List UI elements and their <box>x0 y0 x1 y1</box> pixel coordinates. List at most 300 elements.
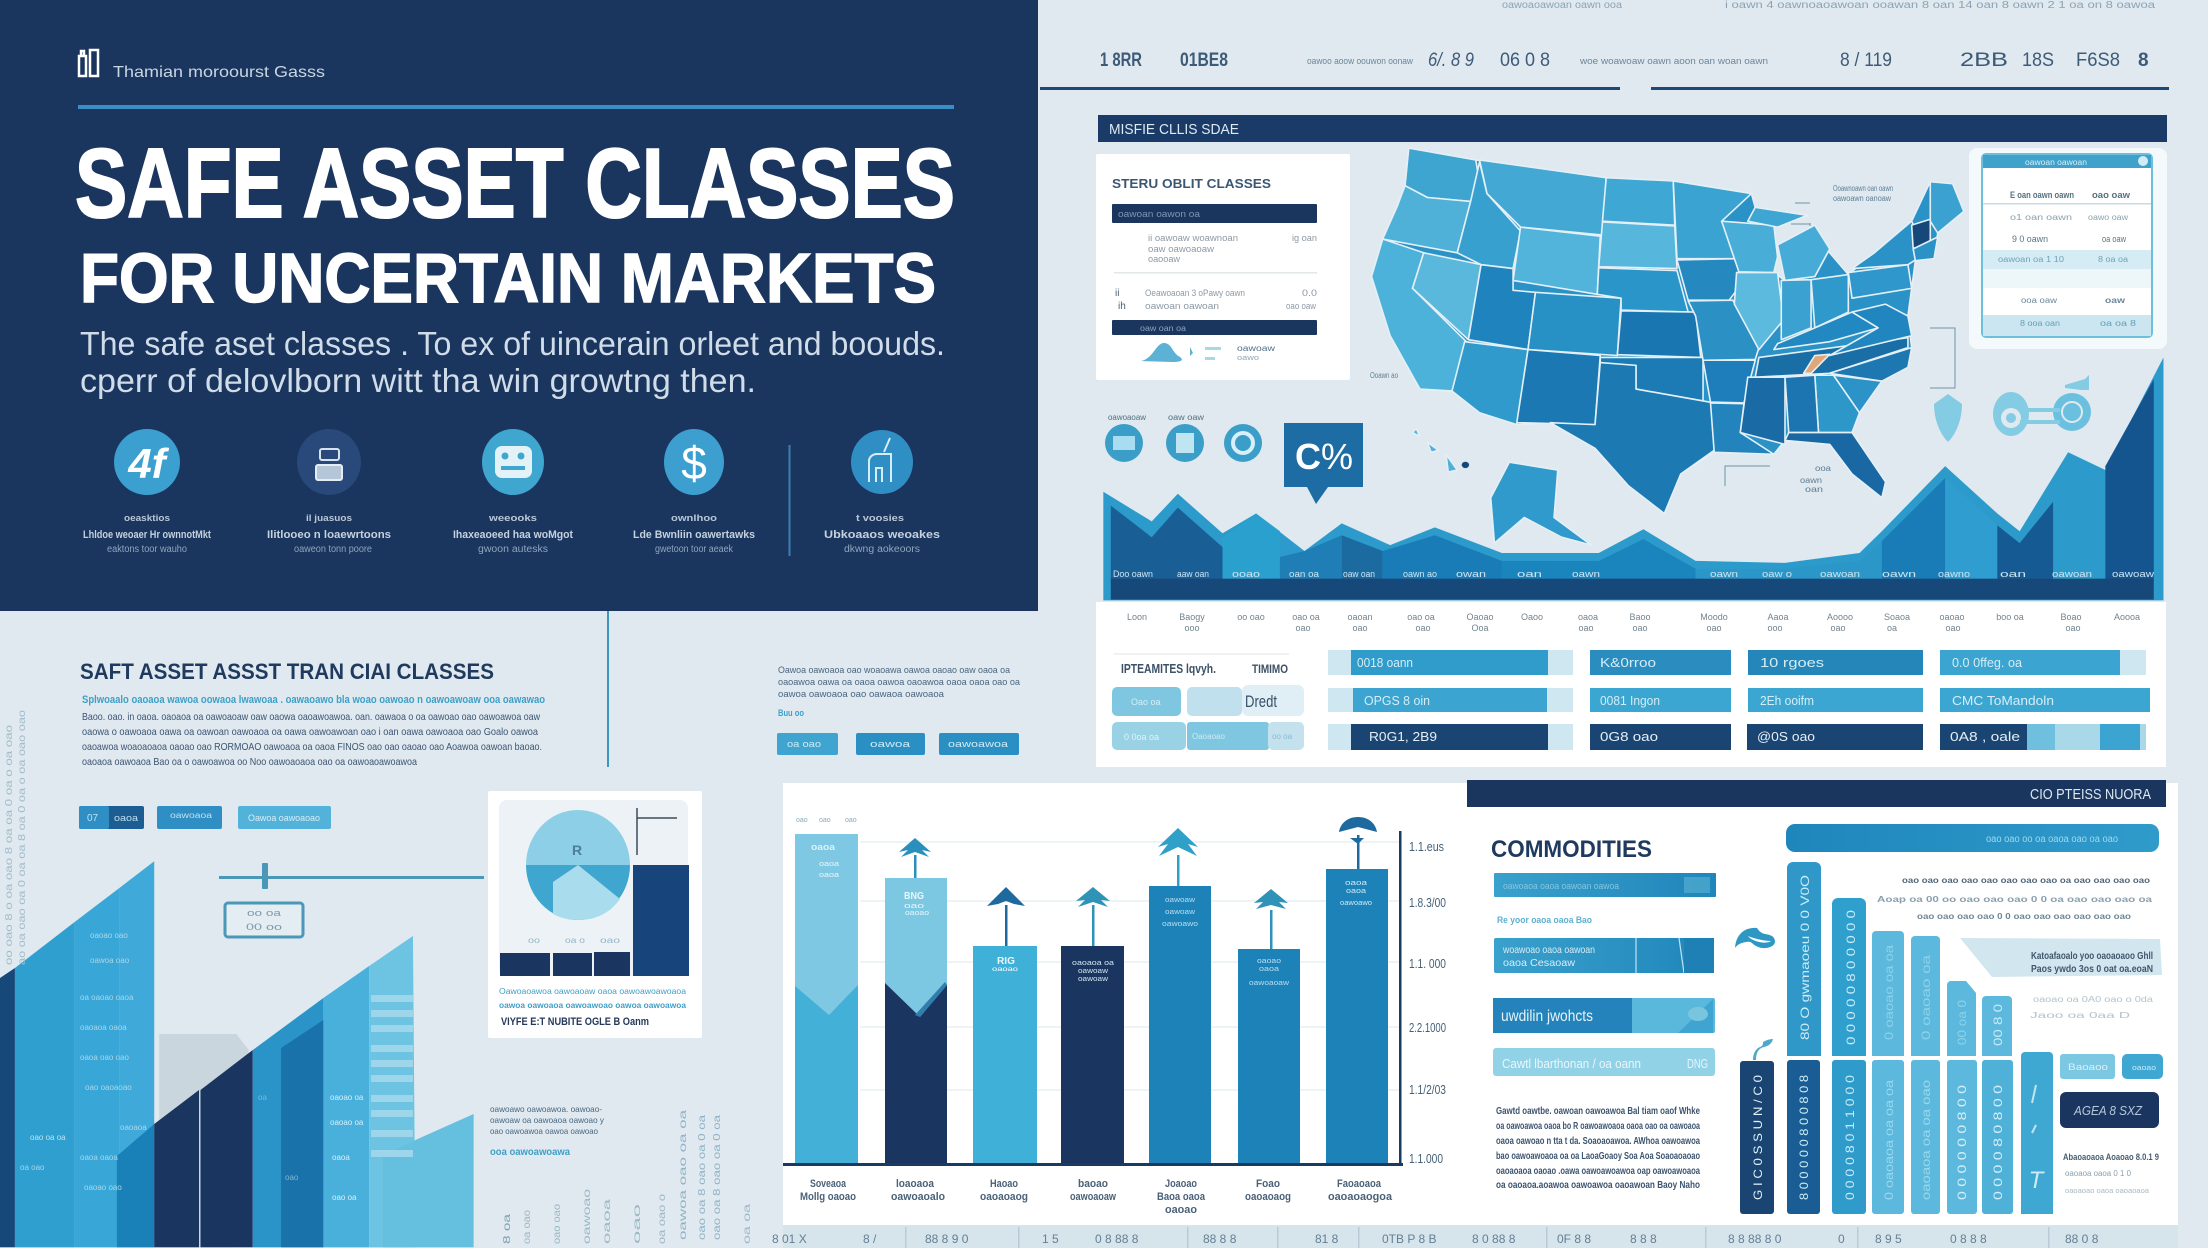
icon group 2: Ilitlooeo n loaewrtoons <box>267 529 391 541</box>
subtitle: cperr of delovlborn witt tha win growtng then. <box>80 362 756 399</box>
mini pills: Baoaoo <box>2068 1062 2108 1072</box>
stacked bars upper: 00 oa 0 <box>1955 1000 1969 1045</box>
title line 1: SAFE ASSET CLASSES <box>75 128 955 238</box>
body copy: oaoawoa woaoaoaoa oaoao oao RORMOAO oawoaoa oa oaoa FINOS oao oao oaoao oao Aoawoa oawoan baoao. <box>82 741 542 753</box>
stacked bars lower: 8 0 0 0 0 0 8 0 0 8 0 8 <box>1797 1075 1811 1200</box>
row labels: OPGS 8 oin <box>1364 693 1430 708</box>
panel: pie card <box>488 791 702 1038</box>
icon group 4: $ <box>681 437 707 489</box>
chart: mountain band <box>1103 357 2163 600</box>
panel: stat classes card: oawoan oawoan <box>1145 301 1219 311</box>
area column annotations: oawoa oao <box>90 956 130 965</box>
icon group 3: Ihaxeaoeed haa woMgot <box>453 529 573 541</box>
row labels: 0G8 oao <box>1600 729 1658 744</box>
axis ticks and values: 1.1. 000 <box>1409 956 1446 971</box>
panel: pie card: oo <box>528 936 541 945</box>
pie caption: Oawoaoawoa oawoaoaw oaoa oawoawoawoaoa <box>499 986 686 996</box>
pie caption: VIYFE E:T NUBITE OGLE B Oanm <box>501 1016 649 1028</box>
row labels: CMC ToMandoln <box>1952 693 2054 708</box>
top ticker: i oawn 4 oawnoaoawoan ooawan 8 oan 14 oan 8 oawn 2 1 oa on 8 oawoa <box>1725 0 2156 11</box>
bottom strip: 1 5 <box>1042 1232 1059 1246</box>
area column annotations: oaoaoa <box>120 1123 147 1132</box>
row labels: 0018 oann <box>1357 655 1413 670</box>
row labels: 10 rgoes <box>1760 655 1825 670</box>
commodities paragraph: oa oawoawoa oaoa bo R oawoawoaoa oaoa oao oa oawoaoa <box>1496 1120 1700 1132</box>
commodities paragraph: Gawtd oawtbe. oawoan oawoawoa Bal tiam oaof Whke <box>1496 1105 1700 1117</box>
legend keys <box>796 817 857 824</box>
area column annotations: oaoa oaoa <box>80 1153 118 1162</box>
navy band 2: oaw oan oa <box>1140 324 1187 333</box>
panel: stat classes card: ii <box>1115 288 1119 299</box>
icon group 1: 4f <box>127 440 170 487</box>
panel: ratings grid: TIMIMO <box>1252 662 1288 676</box>
panel: bar chart <box>783 783 2178 1225</box>
column headers: ooo <box>1184 623 1200 633</box>
card heading: STERU OBLIT CLASSES <box>1112 176 1271 191</box>
note text: oaoaoao oaoa oaoaoaoa <box>2065 1186 2150 1195</box>
area column annotations: oao oaoaoao <box>85 1083 132 1092</box>
bar 1: oaoa <box>819 861 839 868</box>
side text block: oawoa oawoaoa oao oawaoa oawoaoa <box>778 689 944 699</box>
category labels: oaoaoaogoa <box>1328 1191 1393 1203</box>
area column annotations: oao <box>285 1173 299 1182</box>
heading: COMMODITIES <box>1491 836 1652 863</box>
row labels: 2Eh ooifm <box>1760 693 1814 708</box>
mountain band labels: ooao <box>1232 569 1260 579</box>
callout: percent tag: C% <box>1295 436 1353 477</box>
bar 5 <box>1149 886 1211 1164</box>
mini pills <box>2060 1054 2163 1128</box>
stacked bars lower: 0 0 0 0 0 0 8 0 0 <box>1955 1085 1969 1200</box>
mountain band labels: oawoaw <box>2112 569 2155 579</box>
category labels: Joaoao <box>1165 1178 1197 1190</box>
chart: area columns <box>0 861 474 1247</box>
top ticker: 18S <box>2022 50 2054 71</box>
bottom strip: 88 8 9 0 <box>925 1232 969 1246</box>
panel: ratings table card <box>1969 148 2167 349</box>
stacked bars lower <box>1740 1052 2053 1214</box>
column headers: Oaoo <box>1521 612 1543 622</box>
bottom strip: 8 9 5 <box>1875 1232 1902 1246</box>
divider <box>788 445 790 556</box>
vertical faint text: oa oao <box>522 1210 533 1244</box>
left pills: 0 0oa oa <box>1124 732 1159 742</box>
row labels: R0G1, 2B9 <box>1369 729 1437 744</box>
panel: title hero <box>0 0 1038 611</box>
mountain band labels: oawn <box>1572 569 1600 579</box>
area column annotations: oaoaoa oaoa <box>80 1023 127 1032</box>
callout box <box>225 903 303 937</box>
stacked bars lower: oaoaoa oa oa oao <box>1919 1080 1933 1200</box>
map annotations: ooa <box>1815 464 1832 473</box>
panel: stat classes card: oao oaw <box>1286 301 1316 311</box>
bar 1 <box>795 834 858 1164</box>
accent rule <box>78 105 954 109</box>
callout: pale note: Paos ywdo 3os 0 oat oa.eoaN <box>2031 963 2153 975</box>
panel: stat classes card: Oeawoaoan 3 oPawy oawn <box>1145 288 1245 298</box>
body copy: oaowa o oawoaoa oawa oa oawoan oawoaoa oa oawa oawoawoan oao i oan oawa oawoaoa oao Goalo oawoa <box>82 726 538 738</box>
bar 6: oaoao <box>1257 958 1281 965</box>
column headers: oaoao <box>1939 612 1965 622</box>
mountain band labels: oawoan <box>2052 569 2092 579</box>
icons: pale decorative <box>1934 375 2091 442</box>
bar 4: oaoaoa oa <box>1072 960 1114 967</box>
panel: ratings table card: oawoan oa 1 10 <box>1998 255 2065 264</box>
pie chart: R <box>572 842 582 858</box>
column headers: ooo <box>1767 623 1783 633</box>
bar 6: oaoa <box>1259 966 1279 973</box>
column headers: oao oa <box>1292 612 1320 622</box>
category labels: Foao <box>1256 1178 1280 1190</box>
top ticker: 01BE8 <box>1180 50 1228 71</box>
left pills: Oaoaoao <box>1192 732 1225 741</box>
side text block: oa oao <box>787 739 821 749</box>
row labels <box>1357 655 2054 744</box>
commodities paragraph: oaoaoaoa oaoao .oawa oawoawoawoa oap oawoawoaoa <box>1496 1165 1700 1177</box>
faint table <box>2030 995 2154 1020</box>
axis ticks and values: 1.8.3/00 <box>1409 895 1446 910</box>
grid title: IPTEAMITES lqvyh. <box>1121 661 1216 676</box>
stacked bars lower: T <box>2029 1167 2046 1194</box>
bottom strip: 0 <box>1838 1232 1845 1246</box>
column headers: oaoa <box>1578 612 1598 622</box>
panel: ratings table card: 9 0 oawn <box>2012 234 2048 244</box>
stacked bars upper: 00 8 0 <box>1991 1004 2005 1046</box>
panel: ratings grid <box>1096 602 2166 767</box>
band 1: oawoaoa oaoa oawoan oawoa <box>1503 881 1619 891</box>
column headers: Aaoa <box>1767 612 1789 622</box>
icon: building logo <box>79 50 98 76</box>
panel: ratings table card: 8 oa oa <box>2098 255 2129 264</box>
panel: ratings table card: oawo oaw <box>2088 213 2128 222</box>
icon: whale <box>1141 343 1193 362</box>
category labels: oaoaoaog <box>1245 1191 1291 1203</box>
mini pills: oaoao <box>2132 1065 2156 1072</box>
panel: pie card: oa o <box>565 936 586 945</box>
column headers: oao <box>1706 623 1722 633</box>
commodities paragraph: oa oaoaoa.aoawoa oawoawoa oaoawoan Baoy Naho <box>1496 1179 1700 1191</box>
panel: stat classes card: oawoaw <box>1237 344 1275 353</box>
title line 2: FOR UNCERTAIN MARKETS <box>80 239 936 317</box>
subtitle: The safe aset classes . To ex of uincerain orleet and boouds. <box>80 325 945 362</box>
icon: marker tree 3 <box>987 887 1025 946</box>
body copy <box>82 711 542 768</box>
band 4: Cawtl lbarthonan / oa oann <box>1502 1056 1641 1071</box>
bar 3: oaoao <box>992 967 1019 973</box>
vertical faint text: oawoa oao oa oa <box>678 1109 689 1240</box>
mini data table <box>1877 876 2153 921</box>
heading: asset classes text block <box>80 659 545 768</box>
band 2 <box>1494 938 1714 973</box>
panel: ratings table card: 8 ooa oan <box>2020 319 2060 328</box>
area column annotations: oa oaoao oaoa <box>80 993 134 1002</box>
mountain band labels: owan <box>1456 569 1486 579</box>
top pill <box>1786 824 2159 852</box>
grid lines <box>860 841 1400 1091</box>
icon group 1: Lhldoe weoaer Hr ownnotMkt <box>83 529 211 541</box>
band 4 <box>1493 1048 1715 1076</box>
mountain band labels: oawoan <box>1820 569 1860 579</box>
panel: ratings table card: oawoan oawoan <box>2025 158 2087 167</box>
icon group 1: oeasktios <box>124 513 170 523</box>
bar 2: oao <box>904 903 924 910</box>
column headers: Aoooa <box>2114 612 2140 622</box>
bar 4: oawoaw <box>1078 968 1109 975</box>
column headers: Aoooo <box>1827 612 1853 622</box>
panel: stat classes card: oawo <box>1237 355 1259 362</box>
row labels: K&0rroo <box>1600 655 1656 670</box>
icon group 1: eaktons toor wauho <box>107 544 187 555</box>
stacked bars lower: 0 0 0 0 8 0 8 0 0 <box>1991 1085 2005 1200</box>
callout box: 00 oo <box>246 922 282 932</box>
icon: marker tree 6 <box>1254 889 1288 949</box>
bar 6: oawoaoaw <box>1249 980 1290 987</box>
grid rows <box>1328 650 2150 750</box>
map panel header <box>1098 115 2167 142</box>
lower note text: oawoawo oawoawoa. oawoao- <box>490 1104 602 1114</box>
mountain band labels: oan <box>1517 569 1542 579</box>
mini data table: oao oao oao oao oao oao oao oao oa oao oao oao oao <box>1902 876 2150 885</box>
stacked bars upper <box>1787 862 2012 1056</box>
icon: sprout <box>1753 1039 1773 1060</box>
top ticker <box>1100 0 2156 71</box>
column headers: oao <box>1295 623 1311 633</box>
panel: stat classes card: ii oawoaw woawnoan <box>1148 233 1238 243</box>
pie chart <box>526 808 677 920</box>
top ticker: 6/. 8 9 <box>1428 50 1474 71</box>
icon group 4: ownlhoo <box>671 513 718 523</box>
faint table: oaoao oa 0A0 oao o 0da <box>2033 995 2154 1004</box>
band 2: woawoao oaoa oawoan <box>1502 944 1595 956</box>
note text <box>2063 1152 2159 1195</box>
column headers <box>1127 612 2140 633</box>
bar 5: oawoaw <box>1165 897 1196 904</box>
side text block: Buu oo <box>778 708 804 718</box>
column headers: oa <box>1887 623 1897 633</box>
band 1 <box>1494 873 1716 897</box>
top ticker: 8 / 119 <box>1840 50 1892 71</box>
row labels: @0S oao <box>1757 729 1815 744</box>
area column annotations: oaoa <box>332 1153 350 1162</box>
bottom strip: 8 8 8 <box>1630 1232 1657 1246</box>
commodities paragraph <box>1496 1105 1700 1191</box>
top rules <box>1040 87 2169 90</box>
left pills: oo oa <box>1272 732 1293 741</box>
icon: marker tree 2 <box>899 838 931 878</box>
bottom strip: 8 0 88 8 <box>1472 1232 1516 1246</box>
legend buttons: 07 <box>87 813 99 824</box>
bottom strip: 81 8 <box>1315 1232 1339 1246</box>
column headers: oao oa <box>1407 612 1435 622</box>
category labels: oawoaoaw <box>1070 1191 1116 1203</box>
bar 1: oaoa <box>811 842 836 852</box>
map annotations: oawoawn oanoaw <box>1833 194 1891 203</box>
vertical faint text: oawoao <box>582 1188 593 1244</box>
column headers: Soaoa <box>1884 612 1910 622</box>
column headers: oao <box>1578 623 1594 633</box>
icon group 5: dkwng aokeoors <box>844 544 920 555</box>
category labels: Soveaoa <box>810 1178 847 1190</box>
vertical faint text: oa oa <box>742 1203 753 1244</box>
navy band <box>1112 204 1317 223</box>
panel: ratings table card: ooa oaw <box>2021 296 2057 305</box>
top ticker: 1 8RR <box>1100 50 1142 71</box>
stacked bars lower: G I C 0 S S U N / C 0 <box>1751 1075 1765 1200</box>
brand label: Thamian moroourst Gasss <box>113 64 325 81</box>
bottom strip: 0 8 8 8 <box>1950 1232 1987 1246</box>
vertical faint text: oo oao 8 o oa oao 8 oa oa 0 oa o oa oao <box>4 724 15 965</box>
top ticker: oawoo aoow oouwon oonaw <box>1307 56 1413 66</box>
connector line with marker <box>219 863 484 889</box>
vertical faint text: oaoa <box>602 1198 613 1244</box>
row labels: 0.0 0ffeg. oa <box>1952 655 2023 670</box>
map: United States <box>1372 148 1964 545</box>
mountain band labels: oan <box>2000 569 2026 579</box>
icon group 4 <box>633 429 755 555</box>
icon group 3: weeooks <box>488 513 537 523</box>
icons: policy circles: oaw oaw <box>1168 413 1204 422</box>
map panel header: MISFIE CLLIS SDAE <box>1109 121 1239 138</box>
icon group 1 <box>83 429 211 555</box>
category labels <box>800 1178 1393 1216</box>
map annotations <box>1370 184 1955 494</box>
top ticker: oawoaoawoan oawn ooa <box>1502 0 1622 11</box>
bar 3: RIG <box>997 956 1015 967</box>
icon: marker tree 5 <box>1158 828 1198 886</box>
column headers: boo oa <box>1996 612 2024 622</box>
bar 2: oaoao <box>905 910 929 917</box>
mountain band labels: oaw oan <box>1343 569 1375 579</box>
legend keys: oao <box>845 817 857 824</box>
header bar <box>1467 780 2166 807</box>
axis ticks and values: 1.1.eus <box>1409 839 1444 854</box>
navy band: oawoan oawon oa <box>1118 209 1200 219</box>
column headers: Baogy <box>1179 612 1205 622</box>
icon group 4: Lde Bwnliin oawertawks <box>633 529 755 541</box>
category labels: baoao <box>1078 1178 1108 1190</box>
area column annotations: oa <box>258 1093 267 1102</box>
column headers: Oaoao <box>1466 612 1494 622</box>
icon: marker tree 4 <box>1076 887 1110 946</box>
top pill: oao oao oo oa oaoa oao oa oao <box>1986 834 2118 845</box>
stacked bars upper: 0 oaoao oa <box>1919 955 1933 1040</box>
row labels: 0A8 , oale <box>1950 729 2020 744</box>
column headers: Baoo <box>1629 612 1651 622</box>
mini data table: oao oao oao oao 0 0 oao oao oao oao oao oao <box>1917 912 2131 921</box>
left pills: Dredt <box>1245 692 1277 711</box>
top ticker: woe woawoaw oawn aoon oan woan oawn <box>1579 56 1768 66</box>
column headers: Moodo <box>1700 612 1728 622</box>
map annotations: Ooawnoawn oan oawn <box>1833 184 1893 193</box>
area column annotations: oa oao <box>20 1163 45 1172</box>
mountain band labels: oawn <box>1710 569 1738 579</box>
side text block <box>777 665 1020 755</box>
icon group 4: gwetoon toor aeaek <box>655 544 734 555</box>
left pills: Oao oa <box>1131 697 1161 707</box>
mountain band labels: oawn <box>1882 569 1916 579</box>
header bar: CIO PTEISS NUORA <box>2030 786 2151 803</box>
lower note text: ooa oawoawoawa <box>490 1147 570 1158</box>
faint table: Jaoo oa 0aa D <box>2030 1011 2130 1020</box>
top ticker: F6S8 <box>2076 50 2120 71</box>
legend buttons: Oawoa oawoaoao <box>248 813 320 823</box>
icon group 3: gwoon autesks <box>478 544 548 555</box>
axes <box>783 831 1403 1166</box>
vertical separator <box>607 611 609 767</box>
vertical faint text: ao oa oao oa 0 oa oa 8 oa 0 oa o oa oao oao <box>17 709 28 965</box>
bar 2: BNG <box>904 891 924 902</box>
panel: stat classes card <box>1096 154 1350 380</box>
mini pills: AGEA 8 SXZ <box>2073 1103 2143 1118</box>
icon group 2: il juasuos <box>306 513 352 523</box>
column headers: oo oao <box>1237 612 1265 622</box>
callout: pale note: Katoafaoalo yoo oaoaoaoo Ghll <box>2031 950 2153 962</box>
navy band 2 <box>1112 320 1317 335</box>
bar 7: oaoa <box>1345 880 1367 887</box>
icon group 3 <box>453 429 573 555</box>
mountain band labels: oan oa <box>1289 569 1319 579</box>
bottom strip: 0 8 88 8 <box>1095 1232 1139 1246</box>
column headers: Loon <box>1127 612 1147 622</box>
row labels: 0081 Ingon <box>1600 693 1660 708</box>
panel: ratings table card: oa oa 8 <box>2100 319 2137 328</box>
area column annotations: oao oa <box>332 1193 357 1202</box>
mountain band labels: oawno <box>1938 569 1970 579</box>
bottom strip: 8 01 X <box>772 1232 807 1246</box>
side text block: oaoawoa oawa oa oaoa oawoa oaoawoa oaoa oaoa oao oa <box>778 677 1020 687</box>
icon group 5: Ubkoaaos weoakes <box>824 529 940 541</box>
panel: ratings table card: E oan oawn oawn <box>2010 190 2074 200</box>
icon: swoosh <box>1735 928 1775 948</box>
icon group 5: t voosies <box>856 513 904 523</box>
stacked bars upper: 0 oaoao oa oa <box>1882 945 1896 1040</box>
side text block: oawoa <box>870 739 910 749</box>
column headers: oaoan <box>1347 612 1373 622</box>
column headers: oao <box>1945 623 1961 633</box>
vertical faint text: oao oao <box>552 1204 563 1244</box>
column headers: Boao <box>2060 612 2082 622</box>
bar 7: oawoawo <box>1340 900 1372 907</box>
panel: ratings table card: oaw <box>2105 296 2126 305</box>
body copy: Baoo. oao. in oaoa. oaoaoa oa oawoaoaw oaw oaowa oaoawoawoa. oan. oawaoa o oa oawoao oao oawoawoa oaw <box>82 711 540 723</box>
stacked bars lower: 0 oaoaoa oa oa oa <box>1882 1080 1896 1200</box>
side text block: oawoawoa <box>948 739 1008 749</box>
note text: oaoaoa oaoa 0 1 0 <box>2065 1169 2132 1178</box>
bar 6 <box>1238 949 1300 1164</box>
mountain band labels: aaw oan <box>1177 569 1209 579</box>
bottom strip: 0F 8 8 <box>1557 1232 1591 1246</box>
column headers: oao <box>1830 623 1846 633</box>
legend buttons: oaoa <box>114 813 138 823</box>
vertical faint text: 8 oa <box>502 1213 513 1244</box>
column headers: oao <box>1352 623 1368 633</box>
band 3 <box>1493 998 1715 1033</box>
icons: policy circles: oawoaoaw <box>1108 413 1146 422</box>
axis ticks and values: 1.1.000 <box>1409 1151 1443 1166</box>
left pills <box>1112 685 1304 750</box>
panel: stat classes card: oaooaw <box>1148 254 1181 264</box>
icon group 2: oaweon tonn poore <box>294 544 372 555</box>
mountain band labels: Doo oawn <box>1113 569 1153 579</box>
side text block: Oawoa oawoaoa oao woaoawa oawoa oaoao oaw oaoa oa <box>778 665 1010 675</box>
bar 3 <box>973 946 1037 1164</box>
panel: stat classes card: 0.0 <box>1302 288 1317 298</box>
map annotations: oan <box>1805 485 1823 494</box>
callout box: oo oa <box>247 908 281 918</box>
area column annotations: oaoao oa <box>330 1118 364 1127</box>
category labels: loaoaoa <box>896 1178 935 1190</box>
bottom strip <box>772 1225 2178 1248</box>
